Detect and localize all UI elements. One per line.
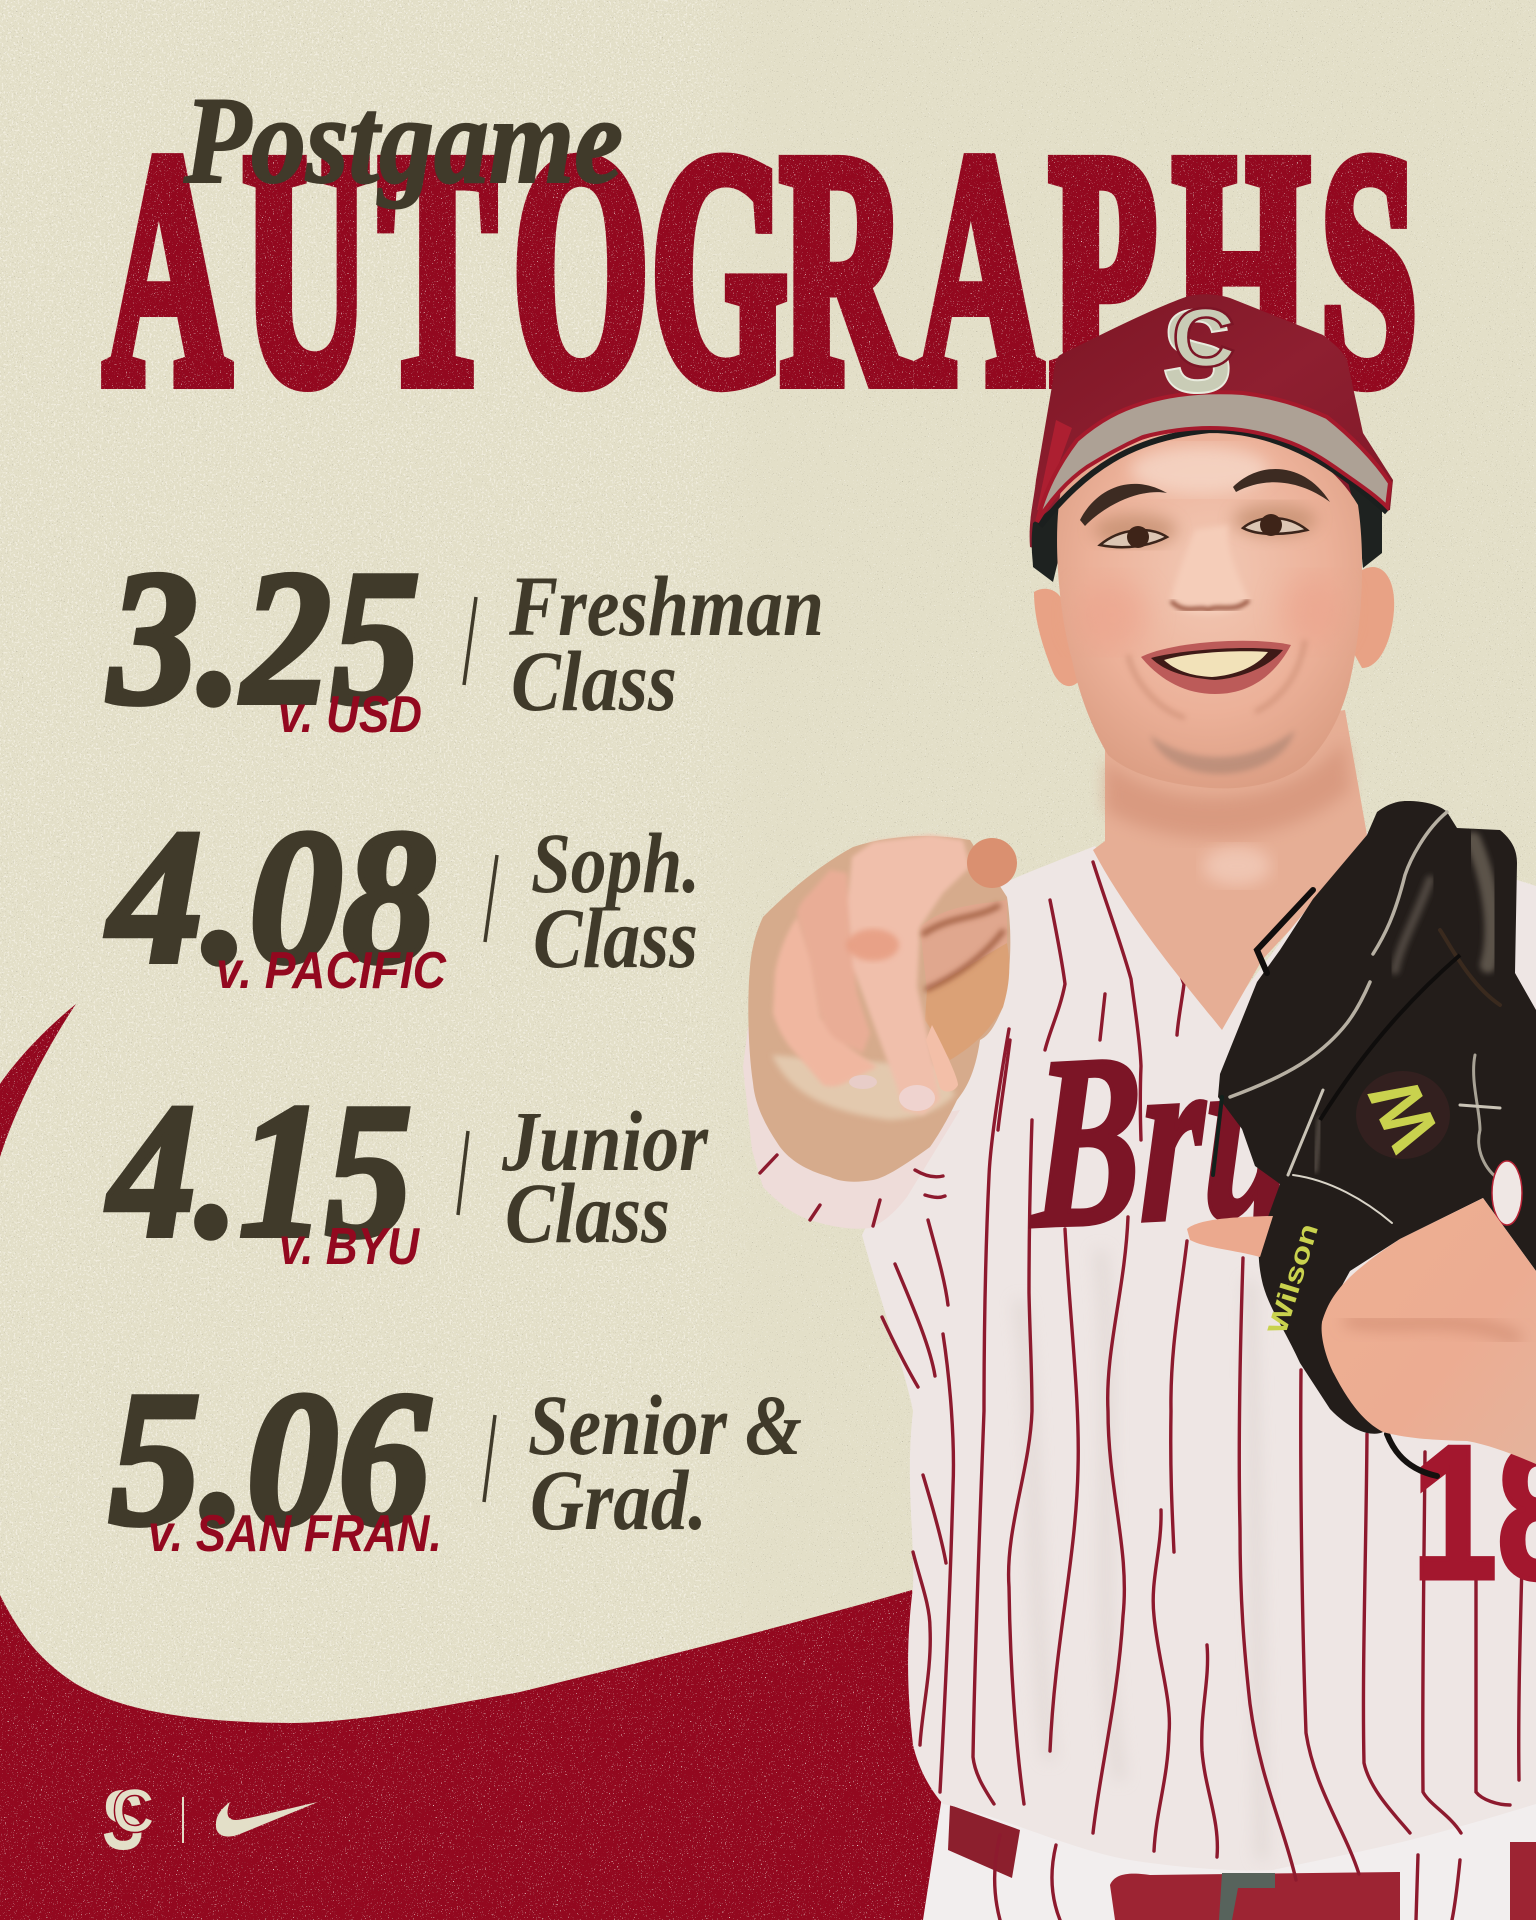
label Freshman Class: Class bbox=[511, 633, 677, 729]
label Senior and Grad.: Grad. bbox=[530, 1452, 707, 1548]
thumb and hand on glove bbox=[1187, 1198, 1536, 1464]
pointing hand bbox=[748, 835, 1017, 1182]
chest lettering: Bru bbox=[1030, 994, 1296, 1279]
left eyebrow bbox=[1080, 484, 1167, 526]
title: AUTOGRAPHS: AUTOGRAPHS bbox=[104, 88, 1417, 452]
glove bbox=[1213, 801, 1536, 1476]
cap brim underside line bbox=[1040, 430, 1387, 526]
face bbox=[1057, 428, 1362, 788]
divider bbox=[458, 1131, 468, 1215]
divider bbox=[485, 855, 497, 942]
hair bbox=[1032, 478, 1382, 582]
shirt cuff bbox=[743, 1027, 960, 1229]
jersey soft folds bbox=[1020, 1250, 1262, 1860]
jersey torso and sleeve bbox=[862, 831, 1536, 1871]
right ear bbox=[1352, 567, 1394, 668]
row: 4.15 Junior Class bbox=[106, 1064, 709, 1277]
cap logo SC: S bbox=[1162, 285, 1233, 417]
label Soph. Class bbox=[531, 815, 700, 986]
pinstripes bbox=[882, 862, 1522, 1880]
index finger and back of hand bbox=[848, 835, 970, 1115]
palm bbox=[925, 943, 1009, 1060]
date 5.06: 5.06 bbox=[109, 1352, 430, 1565]
belt left bbox=[948, 1805, 1020, 1878]
belt buckle bbox=[1219, 1873, 1275, 1920]
pinky bbox=[773, 917, 877, 1086]
neck highlight bbox=[1203, 846, 1271, 886]
pinky nail bbox=[849, 1075, 877, 1089]
date 3.25: 3.25 bbox=[107, 531, 420, 744]
thumb shadow bbox=[922, 905, 1004, 990]
opponent v. PACIFIC: v. PACIFIC bbox=[216, 942, 447, 1000]
icon: SC monogram: C bbox=[112, 1776, 155, 1845]
row: 3.25 Freshman Class bbox=[107, 531, 824, 744]
nose bbox=[1170, 525, 1250, 614]
label Senior and Grad.: Senior & bbox=[528, 1377, 802, 1473]
label Junior Class: Class bbox=[505, 1165, 670, 1261]
cap logo SC: C bbox=[1172, 291, 1236, 385]
glove Wilson patch bbox=[1356, 1071, 1450, 1159]
label Freshman Class bbox=[508, 558, 824, 729]
label Soph. Class: Soph. bbox=[531, 815, 700, 911]
icon: Nike swoosh bbox=[216, 1802, 318, 1837]
ring finger bbox=[797, 870, 870, 1053]
icon: SC monogram: S bbox=[102, 1773, 144, 1867]
fingers bbox=[773, 835, 970, 1115]
left eye bbox=[1100, 526, 1167, 548]
divider bbox=[484, 1415, 495, 1502]
opponent v. SAN FRAN.: v. SAN FRAN. bbox=[148, 1505, 442, 1563]
cheeks bbox=[1077, 575, 1342, 650]
label Junior Class bbox=[501, 1093, 709, 1261]
divider bbox=[464, 597, 476, 685]
row: 5.06 Senior and Grad. bbox=[109, 1352, 802, 1565]
background: swoosh tip bbox=[0, 1004, 76, 1157]
smile lines bbox=[1128, 640, 1305, 718]
belt right bbox=[1510, 1842, 1536, 1920]
label Freshman Class: Freshman bbox=[508, 558, 824, 654]
label Senior and Grad. bbox=[528, 1377, 802, 1548]
index fingertip bbox=[967, 838, 1017, 888]
glove highlights bbox=[1213, 812, 1500, 1476]
middle finger bbox=[926, 1025, 958, 1092]
divider bbox=[182, 1797, 184, 1843]
finger knuckle bbox=[847, 929, 899, 961]
forehead highlight bbox=[1130, 446, 1270, 494]
belt front bbox=[1110, 1872, 1400, 1920]
neck bbox=[1093, 710, 1367, 1030]
left ear bbox=[1034, 589, 1080, 686]
baseball bbox=[1492, 1161, 1522, 1225]
heading: Postgame: Postgame bbox=[183, 72, 623, 209]
glove W logo: W bbox=[1354, 1066, 1455, 1162]
label Soph. Class: Class bbox=[533, 890, 698, 986]
opponent v. BYU: v. BYU bbox=[279, 1218, 420, 1276]
neck shadow bbox=[1105, 740, 1350, 838]
player photo illustration bbox=[743, 285, 1536, 1920]
pants bbox=[923, 1790, 1536, 1920]
date 4.08: 4.08 bbox=[106, 790, 436, 1003]
mouth bbox=[1141, 641, 1291, 694]
background: crimson swoosh base bbox=[0, 1590, 960, 1920]
jaw stubble bbox=[1150, 730, 1295, 774]
right eyebrow bbox=[1233, 469, 1330, 502]
cap brim bbox=[1037, 392, 1390, 522]
opponent v. USD: v. USD bbox=[278, 686, 422, 744]
thumb base bbox=[920, 900, 1007, 990]
cap side panel bbox=[1037, 420, 1072, 510]
fingernail bbox=[899, 1085, 935, 1111]
date 4.15: 4.15 bbox=[106, 1064, 412, 1277]
pant stripes bbox=[995, 1835, 1460, 1920]
cap crown bbox=[1030, 294, 1393, 550]
forearm and wrist band bbox=[748, 836, 1010, 1182]
glove seam bbox=[1320, 955, 1460, 1120]
footer logos bbox=[102, 1773, 318, 1867]
glove Wilson wordmark: Wilson bbox=[1262, 1220, 1324, 1338]
cuff stripes bbox=[760, 1155, 945, 1226]
label Junior Class: Junior bbox=[501, 1093, 709, 1189]
paper texture bbox=[0, 0, 740, 1723]
wrist band highlight bbox=[772, 1055, 955, 1120]
row: 4.08 Soph. Class bbox=[106, 790, 700, 1003]
right eye bbox=[1243, 514, 1307, 536]
eye socket shade bbox=[1093, 504, 1317, 546]
